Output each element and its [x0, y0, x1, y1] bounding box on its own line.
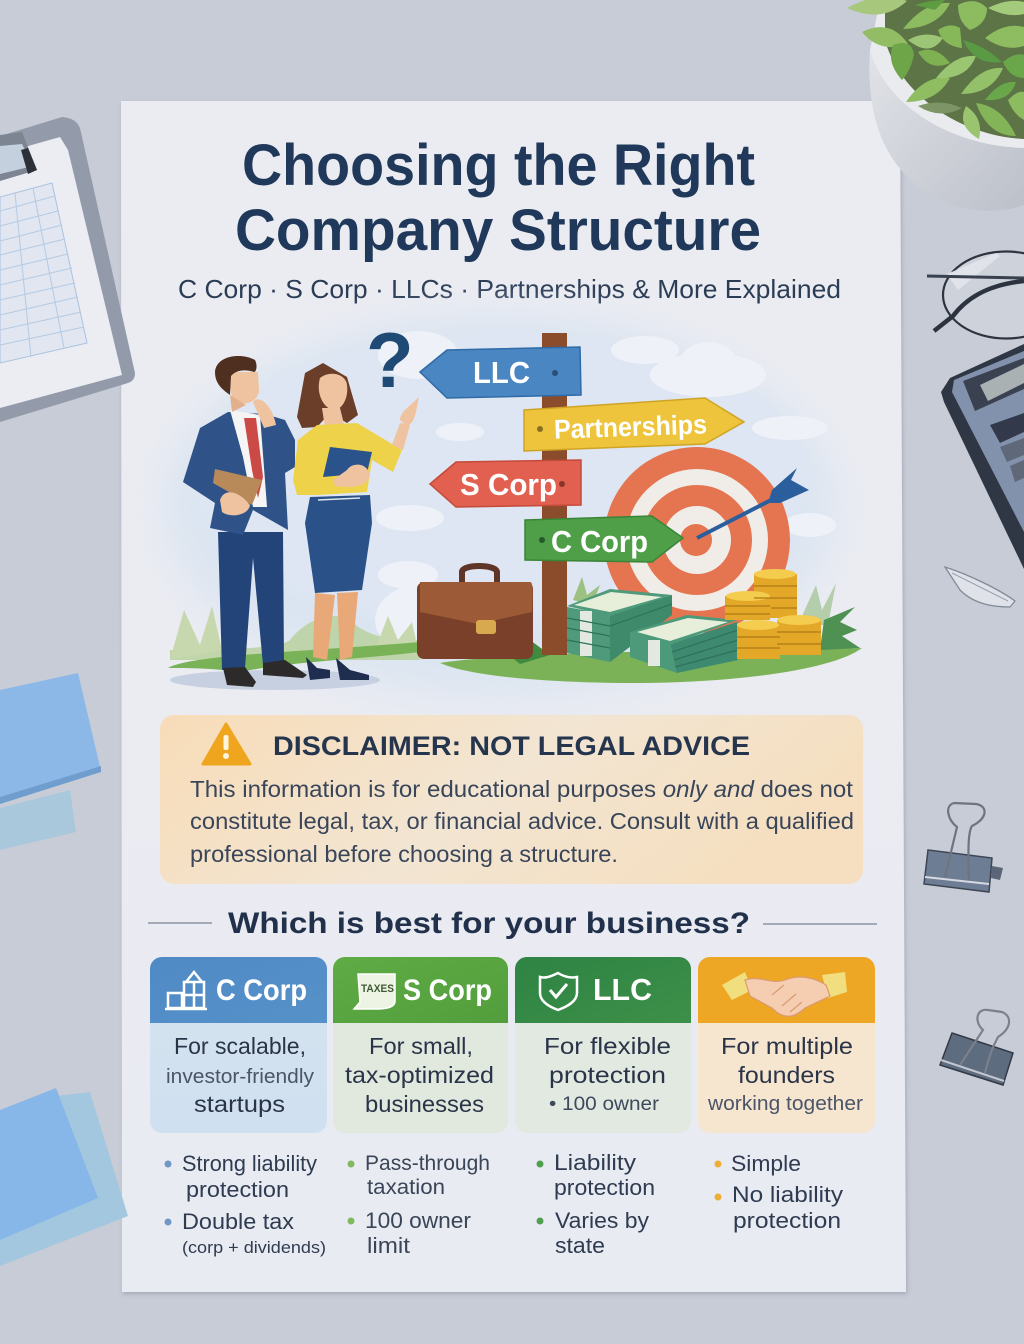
bullets: founders: [714, 1151, 843, 1233]
signpost pole: [542, 333, 567, 655]
title: Company Structure: [235, 198, 761, 263]
clouds: [375, 331, 836, 658]
disclaimer panel: [160, 715, 863, 884]
card description: For scalable,: [174, 1033, 306, 1059]
card description: [166, 1033, 314, 1117]
bullets: S Corp: [348, 1152, 490, 1258]
icon: tax document: [354, 974, 395, 1009]
card: C Corp: [150, 957, 327, 1133]
potted plant: [847, 0, 1024, 211]
cash stacks: [567, 589, 738, 673]
sign: C Corp: [525, 516, 683, 562]
card description: startups: [194, 1091, 285, 1117]
sky wash: [165, 315, 835, 695]
woman in yellow blouse: [293, 363, 419, 680]
eyeglasses: [927, 252, 1024, 338]
icon: shield: [540, 973, 577, 1010]
sticky notes upper left: [0, 673, 101, 850]
bullets: LLC: Varies by: [555, 1208, 649, 1233]
bullets: C Corp: [164, 1151, 326, 1257]
sticky notes lower left: [0, 1088, 128, 1266]
card: Partnerships founders: [698, 957, 875, 1133]
bullets: C Corp: Double tax: [182, 1209, 294, 1234]
bullets: LLC: Liability: [554, 1150, 636, 1175]
bullets: founders: Simple: [731, 1151, 801, 1176]
card description: founders: [738, 1062, 835, 1088]
sign: S Corp: S Corp: [460, 467, 557, 502]
bullets: founders: protection: [733, 1208, 841, 1233]
title: [235, 133, 761, 263]
man in navy suit: [183, 356, 307, 687]
card description: tax-optimized: [345, 1062, 494, 1088]
icon: tax document: TAXES: [361, 983, 394, 995]
illustration: crossroads scene: [165, 315, 862, 695]
disclaimer body: professional before choosing a structure.: [190, 841, 618, 867]
calculator: [941, 344, 1024, 569]
disclaimer body: constitute legal, tax, or financial advice. Consult with a qualified: [190, 808, 854, 834]
question mark: ?: [366, 316, 414, 404]
card description: [707, 1033, 863, 1115]
paper clip accessory: [945, 567, 1015, 607]
card description: protection: [549, 1062, 666, 1088]
card description: For small,: [369, 1033, 473, 1059]
card description: For flexible: [544, 1033, 671, 1059]
icon: handshake: [722, 972, 847, 1016]
gold coin stacks: [725, 569, 821, 659]
sign: LLC: LLC: [473, 355, 530, 390]
bullets: C Corp: (corp + dividends): [182, 1238, 326, 1257]
paper sheet: [121, 101, 906, 1292]
disclaimer body: [190, 776, 854, 867]
bullets: founders: No liability: [732, 1182, 843, 1207]
bullets: S Corp: 100 owner: [365, 1208, 471, 1233]
bullets: S Corp: limit: [367, 1233, 410, 1258]
disclaimer heading: DISCLAIMER: NOT LEGAL ADVICE: [273, 731, 750, 761]
card description: investor-friendly: [166, 1066, 314, 1088]
binder clip lower: [940, 1010, 1013, 1085]
sign: C Corp: C Corp: [551, 524, 648, 559]
target: [604, 447, 790, 633]
briefcase: [417, 566, 533, 659]
card description: businesses: [365, 1091, 484, 1117]
card description: • 100 owner: [549, 1094, 660, 1115]
sign: Partnerships: [524, 398, 744, 451]
section heading: Which is best for your business?: [228, 907, 750, 940]
sign: LLC: [420, 347, 581, 398]
card: S Corp: [333, 957, 508, 1133]
card description: working together: [707, 1093, 863, 1115]
subtitle: C Corp · S Corp · LLCs · Partnerships & More Explained: [178, 274, 841, 304]
arrow in target: [697, 468, 809, 538]
card description: For multiple: [721, 1033, 853, 1059]
card: LLC: [515, 957, 691, 1133]
card description: [544, 1033, 671, 1115]
sign: S Corp: [430, 460, 581, 507]
clipboard with spreadsheet: [0, 117, 135, 422]
disclaimer body: This information is for educational purposes only and does not: [190, 776, 854, 802]
icon: warning triangle: [203, 724, 250, 764]
binder clip upper: [924, 803, 1003, 892]
sign: Partnerships: Partnerships: [553, 409, 707, 445]
bullets: LLC: protection: [554, 1175, 655, 1200]
card heading: LLC: LLC: [593, 972, 652, 1007]
bullets: C Corp: protection: [186, 1177, 289, 1202]
title: Choosing the Right: [242, 133, 755, 198]
bullets: S Corp: Pass-through: [365, 1152, 490, 1175]
icon: building: [165, 972, 207, 1009]
bullets: LLC: state: [555, 1233, 605, 1258]
card heading: C Corp: C Corp: [216, 974, 307, 1007]
bullets: C Corp: Strong liability: [182, 1151, 317, 1176]
ground and grass: [168, 577, 862, 690]
card description: [345, 1033, 494, 1117]
bullets: S Corp: taxation: [367, 1176, 445, 1199]
bullets: LLC: [536, 1150, 655, 1258]
card heading: S Corp: S Corp: [403, 974, 492, 1007]
